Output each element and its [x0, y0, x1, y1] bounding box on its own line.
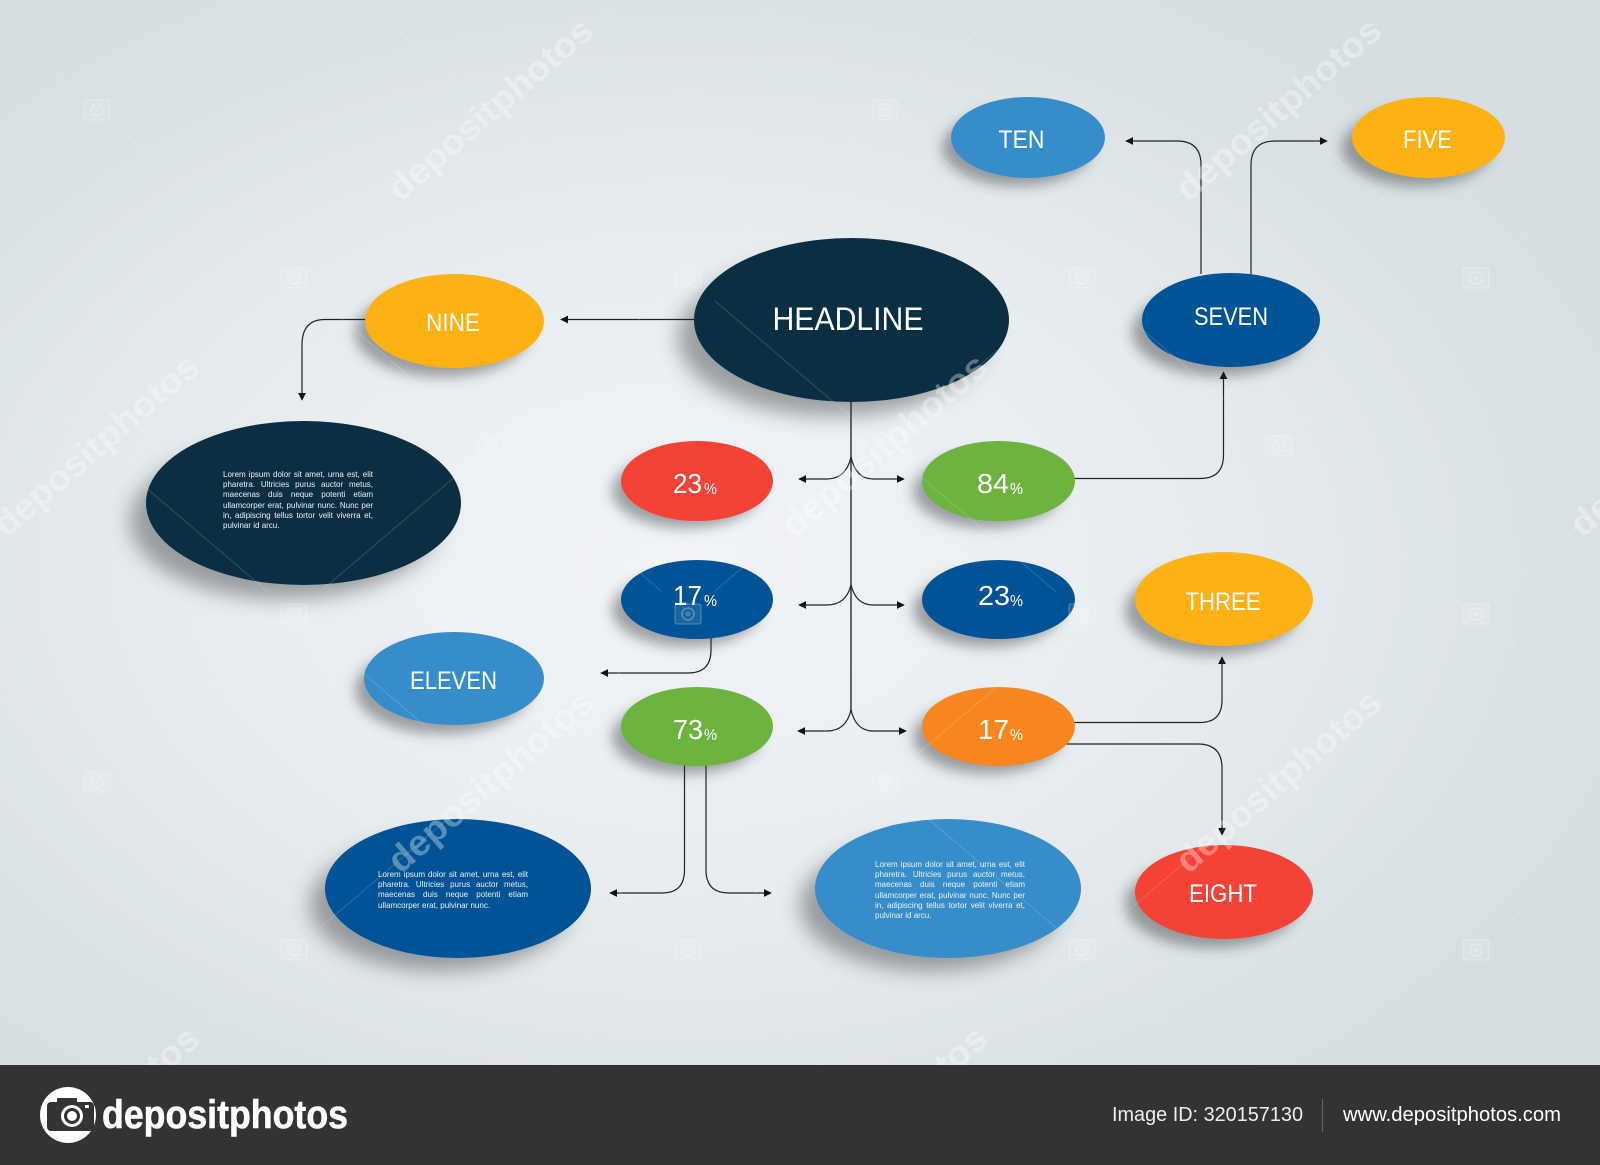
node: 17 percent orange: 17	[978, 714, 1009, 745]
icon: camera logo	[40, 1087, 96, 1143]
node: 17 percent orange	[913, 687, 1075, 774]
image id: Image ID: 320157130	[1112, 1103, 1303, 1126]
node: 84 percent green	[913, 441, 1075, 528]
node: FIVE: FIVE	[1403, 126, 1452, 154]
arrow: seven to ten	[1126, 141, 1201, 274]
node: HEADLINE: HEADLINE	[772, 301, 924, 337]
node: 17 percent blue: %	[704, 593, 717, 610]
node: 17 percent blue	[612, 560, 773, 647]
node: SEVEN	[1132, 273, 1320, 376]
node: 23 percent red: 23	[673, 468, 702, 499]
watermark overlay: depositphotos	[379, 9, 601, 209]
node: 73 percent green	[612, 687, 773, 774]
arrow: 17 percent to eleven	[601, 638, 711, 673]
node: 17 percent orange: %	[1010, 727, 1023, 744]
node: ELEVEN: ELEVEN	[410, 667, 497, 695]
watermark overlay: depositphotos	[1167, 9, 1389, 209]
node: THREE	[1125, 552, 1313, 655]
arrow: 17 percent to three	[1074, 657, 1222, 722]
panel: light blue text ellipse: in, adipiscing tellus tortor velit viverra et,	[875, 901, 1025, 910]
node: EIGHT: EIGHT	[1189, 880, 1257, 908]
logo wordmark: depositphotos	[102, 1093, 348, 1137]
node: HEADLINE	[678, 238, 1009, 416]
arrow: 73 percent to blue text panel	[610, 765, 684, 893]
panel: dark text ellipse: in, adipiscing tellus tortor velit viverra et,	[223, 511, 373, 520]
panel: blue text ellipse: Lorem ipsum dolor sit amet, urna est, elit	[378, 870, 528, 879]
arrow: headline to nine	[561, 318, 694, 320]
node: 23 percent red: %	[704, 481, 717, 498]
watermark overlay: depositphotos	[1167, 681, 1389, 881]
node: TEN: TEN	[998, 126, 1044, 154]
arrow: 17 percent to eight	[1064, 744, 1222, 835]
node: NINE	[355, 274, 544, 377]
node: 73 percent green: %	[704, 727, 717, 744]
node: 23 percent blue: 23	[978, 580, 1010, 611]
panel: dark text ellipse: Lorem ipsum dolor sit amet, urna est, elit	[223, 470, 373, 479]
arrow: 84 percent to seven	[1074, 372, 1224, 478]
panel: dark text ellipse: pharetra. Ultricies purus auctor metus,	[223, 480, 373, 489]
panel: light blue text ellipse: pharetra. Ultricies purus auctor metus,	[875, 870, 1025, 879]
panel: light blue text ellipse: maecenas duis neque potenti etiam	[875, 880, 1025, 889]
panel: blue text ellipse: maecenas duis neque potenti etiam	[378, 890, 528, 899]
node: FIVE	[1342, 97, 1505, 186]
panel: light blue text ellipse: ullamcorper erat, pulvinar nunc. Nunc per	[875, 891, 1025, 900]
node: 84 percent green: 84	[977, 468, 1009, 499]
node: NINE: NINE	[426, 309, 480, 337]
node: 23 percent blue: %	[1010, 593, 1023, 610]
panel: light blue text ellipse	[800, 819, 1081, 971]
node: 23 percent blue	[913, 560, 1075, 647]
node: THREE: THREE	[1186, 588, 1260, 616]
arrow: nine to text panel	[302, 320, 366, 400]
panel: dark text ellipse: maecenas duis neque potenti etiam	[223, 490, 373, 499]
node: 73 percent green: 73	[673, 714, 703, 745]
panel: dark text ellipse	[130, 421, 461, 599]
arrow: 73 percent to light blue text panel	[706, 765, 771, 893]
panel: blue text ellipse: ullamcorper erat, pulvinar nunc.	[378, 901, 490, 910]
panel: dark text ellipse: ullamcorper erat, pulvinar nunc. Nunc per	[223, 501, 373, 510]
node: 84 percent green: %	[1010, 481, 1023, 498]
arrow: seven to five	[1251, 141, 1327, 274]
node: SEVEN: SEVEN	[1194, 303, 1268, 331]
panel: blue text ellipse	[310, 819, 591, 971]
connectors	[302, 141, 1327, 893]
website: www.depositphotos.com	[1342, 1103, 1561, 1126]
node: ELEVEN	[355, 632, 544, 734]
node: TEN	[942, 97, 1105, 186]
panel: light blue text ellipse: Lorem ipsum dolor sit amet, urna est, elit	[875, 860, 1025, 869]
node: 23 percent red	[612, 441, 773, 528]
connector: trunk with branches	[798, 402, 906, 731]
panel: blue text ellipse: pharetra. Ultricies purus auctor metus,	[378, 880, 528, 889]
panel: dark text ellipse: pulvinar id arcu.	[223, 521, 279, 530]
node: 17 percent blue: 17	[673, 580, 702, 611]
panel: light blue text ellipse: pulvinar id arcu.	[875, 911, 931, 920]
watermark overlay: depositphotos	[773, 345, 995, 545]
watermark overlay: depositphotos	[379, 681, 601, 881]
footer bar	[0, 1065, 1600, 1165]
node: EIGHT	[1125, 845, 1313, 948]
